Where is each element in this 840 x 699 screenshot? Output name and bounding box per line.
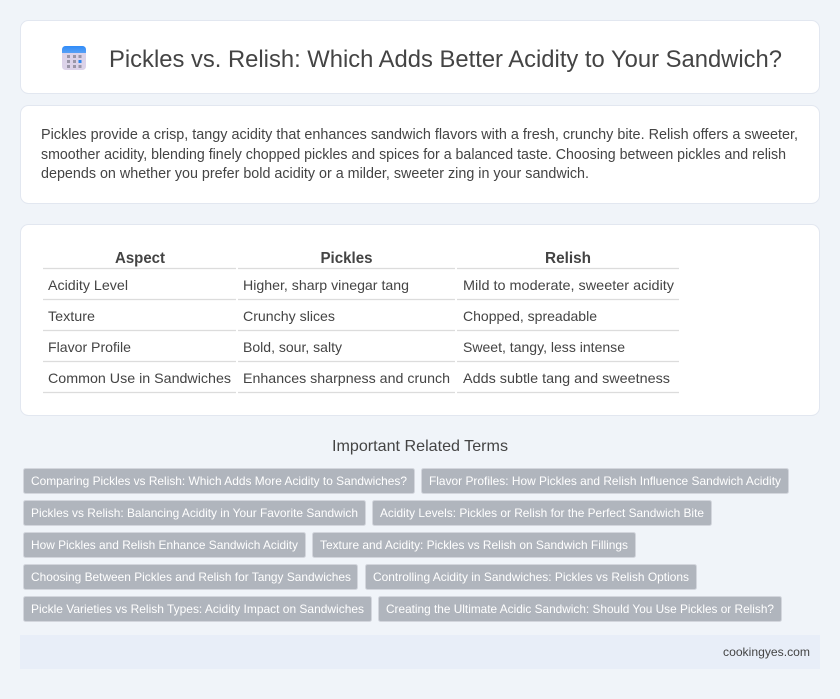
table rows	[48, 277, 674, 386]
table rows: Chopped, spreadable	[463, 308, 597, 324]
title: Pickles vs. Relish: Which Adds Better Acidity to Your Sandwich?	[109, 46, 782, 73]
table rows: Higher, sharp vinegar tang	[243, 277, 409, 293]
table rows: Crunchy slices	[243, 308, 335, 324]
table header: Relish	[545, 250, 591, 267]
related term tags: Comparing Pickles vs Relish: Which Adds More Acidity to Sandwiches?	[31, 474, 407, 488]
table header: Aspect	[115, 250, 166, 267]
related term tags: How Pickles and Relish Enhance Sandwich Acidity	[31, 538, 298, 552]
intro paragraph: depends on whether you prefer bold acidity or a milder, sweeter zing in your sandwich.	[41, 166, 589, 182]
panel: comparison table	[20, 224, 820, 416]
panel: intro text	[20, 106, 820, 204]
icon: calendar	[62, 46, 86, 70]
related term tags	[24, 468, 788, 622]
related term tags: Acidity Levels: Pickles or Relish for the Perfect Sandwich Bite	[380, 506, 704, 520]
table rows: Common Use in Sandwiches	[48, 370, 231, 386]
intro paragraph: smoother acidity, blending finely chopped pickles and spices for a balanced taste. Choosing between pickles and relish	[41, 147, 786, 163]
intro paragraph	[41, 127, 798, 182]
related term tags: Texture and Acidity: Pickles vs Relish on Sandwich Fillings	[320, 538, 628, 552]
table header	[115, 250, 591, 267]
related term tags: Creating the Ultimate Acidic Sandwich: Should You Use Pickles or Relish?	[386, 602, 774, 616]
table rules	[43, 268, 679, 392]
related term tags: Controlling Acidity in Sandwiches: Pickles vs Relish Options	[373, 570, 689, 584]
related term tags: Pickle Varieties vs Relish Types: Acidity Impact on Sandwiches	[31, 602, 364, 616]
related term tags: Choosing Between Pickles and Relish for Tangy Sandwiches	[31, 570, 351, 584]
related term tags: Flavor Profiles: How Pickles and Relish Influence Sandwich Acidity	[429, 474, 781, 488]
table rows: Adds subtle tang and sweetness	[463, 370, 670, 386]
title panel	[20, 20, 820, 94]
table rows: Sweet, tangy, less intense	[463, 339, 625, 355]
footer source: cookingyes.com	[723, 645, 810, 659]
table header: Pickles	[320, 250, 373, 267]
table rows: Enhances sharpness and crunch	[243, 370, 450, 386]
related term tags: Pickles vs Relish: Balancing Acidity in Your Favorite Sandwich	[31, 506, 358, 520]
table rows: Acidity Level	[48, 277, 128, 293]
table rows: Texture	[48, 308, 95, 324]
table rows: Flavor Profile	[48, 339, 131, 355]
intro paragraph: Pickles provide a crisp, tangy acidity that enhances sandwich flavors with a fresh, crunchy bite. Relish offers a sweeter,	[41, 127, 798, 143]
footer	[20, 635, 820, 669]
table rows: Mild to moderate, sweeter acidity	[463, 277, 674, 293]
heading: related terms: Important Related Terms	[332, 438, 508, 455]
table rows: Bold, sour, salty	[243, 339, 342, 355]
